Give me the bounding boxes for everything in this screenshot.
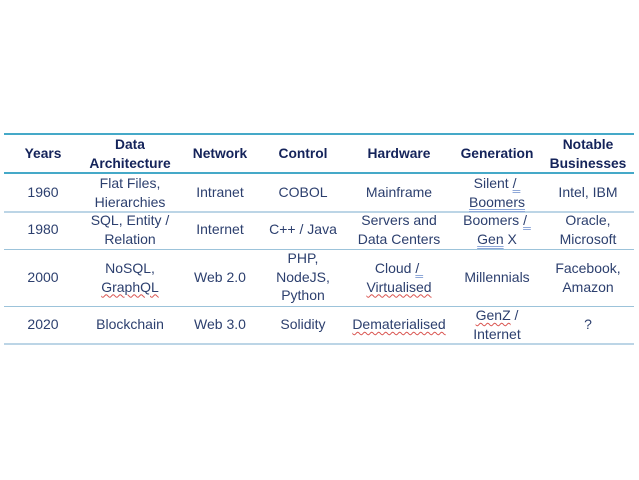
row 2000: control: Python	[281, 287, 325, 303]
row 2000: network: Web 2.0	[194, 269, 246, 285]
row 2020: generation: GenZ /	[476, 307, 518, 323]
row 2000: generation: Millennials	[464, 269, 530, 285]
row 1980: hardware	[358, 212, 440, 246]
row 1980: notable businesses: Oracle,	[565, 212, 611, 228]
row 1980: data architecture: SQL, Entity /	[91, 212, 169, 228]
row 2020: notable businesses: ?	[584, 316, 592, 332]
header: Hardware: Hardware	[368, 146, 430, 161]
row 1980: generation	[463, 212, 531, 249]
row 2000: notable businesses	[555, 260, 621, 294]
row 2000: hardware	[366, 260, 432, 298]
header: Data Architecture	[89, 137, 171, 170]
row 1960: generation: Boomers	[469, 194, 525, 210]
rule: header bottom	[4, 172, 634, 174]
row 1980: notable businesses	[560, 212, 616, 246]
row 1960: data architecture	[95, 175, 165, 210]
row 1960: generation	[469, 175, 525, 212]
row 2000: data architecture: NoSQL,	[105, 260, 155, 276]
row 1960: hardware: Mainframe	[366, 184, 432, 200]
row 1960: data architecture: Hierarchies	[95, 194, 165, 210]
row 2000: data architecture	[101, 260, 159, 298]
row 2020: control: Solidity	[280, 316, 326, 332]
rule: row 3 bottom	[4, 306, 634, 307]
row 1980: hardware: Data Centers	[358, 230, 440, 246]
header: Data Architecture: Data	[115, 137, 145, 152]
row 1980: years: 1980	[27, 221, 59, 237]
rule: row 1 bottom	[4, 211, 634, 212]
row 1980: network: Internet	[196, 221, 244, 237]
row 2020: generation	[473, 307, 521, 342]
row 1960: generation: Silent /	[474, 175, 516, 191]
row 2020: network: Web 3.0	[194, 316, 246, 332]
row 2000: data architecture: GraphQL	[101, 278, 159, 294]
row 1980: data architecture	[91, 212, 170, 246]
header: Data Architecture: Architecture	[89, 156, 171, 170]
row 1980: notable businesses: Microsoft	[560, 230, 616, 246]
row 1980: generation: Gen X	[477, 230, 517, 246]
row 1960: control: COBOL	[278, 184, 328, 200]
row 1980: control: C++ / Java	[269, 221, 337, 237]
header: Control: Control	[278, 146, 328, 161]
row 2020: hardware: Dematerialised	[352, 316, 446, 332]
row 1960: years: 1960	[27, 184, 59, 200]
header: Years: Years	[25, 146, 61, 161]
row 2000: hardware: Cloud /	[375, 260, 419, 276]
row 2000: control: NodeJS,	[276, 268, 330, 284]
row 1960: notable businesses: Intel, IBM	[558, 184, 618, 200]
header: Generation: Generation	[461, 146, 533, 161]
row 1980: hardware: Servers and	[361, 212, 437, 228]
row 2000: notable businesses: Facebook,	[555, 260, 621, 276]
row 2000: years: 2000	[27, 269, 59, 285]
row 1980: data architecture: Relation	[104, 230, 156, 246]
header: Notable Businesses: Notable	[563, 137, 613, 152]
row 2000: control: PHP,	[288, 250, 318, 266]
row 2020: years: 2020	[27, 316, 59, 332]
row 2020: data architecture: Blockchain	[96, 316, 164, 332]
rule: row 4 bottom	[4, 343, 634, 344]
row 1980: generation: Boomers /	[463, 212, 527, 228]
rule: row 2 bottom	[4, 249, 634, 250]
header: Notable Businesses: Businesses	[550, 156, 626, 170]
row 2000: hardware: Virtualised	[366, 278, 432, 294]
rule: table top	[4, 133, 634, 135]
row 2000: notable businesses: Amazon	[562, 278, 614, 294]
row 1960: data architecture: Flat Files,	[100, 175, 160, 191]
row 2000: control	[276, 250, 330, 303]
header: Network: Network	[193, 146, 247, 161]
row 2020: generation: Internet	[473, 326, 521, 342]
row 1960: network: Intranet	[196, 184, 244, 200]
header: Notable Businesses	[550, 137, 626, 170]
